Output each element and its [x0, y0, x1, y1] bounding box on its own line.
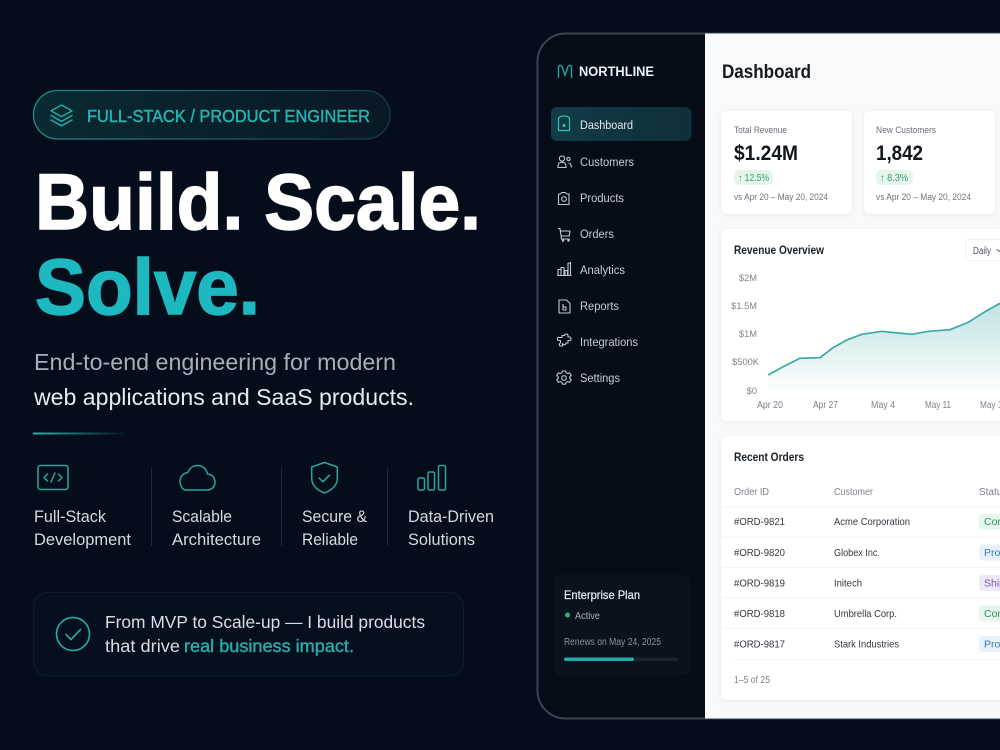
stat card: revenue: $1.24M [734, 141, 798, 165]
headline: Build. Scale. [35, 157, 481, 246]
nav: products [558, 191, 624, 205]
plan card: Renews on May 24, 2025 [564, 637, 661, 648]
subtitle: web applications and SaaS products. [33, 384, 414, 410]
plan card: Active [575, 610, 600, 622]
logo: NORTHLINE [579, 64, 654, 79]
table header: Order ID [734, 487, 769, 498]
nav: customers [558, 155, 634, 169]
capability: data-driven [408, 508, 494, 549]
nav: products: Products [580, 191, 624, 205]
range selector [966, 240, 1000, 260]
row 9820: #ORD-9820 [734, 547, 785, 559]
nav: reports [559, 299, 619, 313]
stat card: revenue: Total Revenue [734, 125, 787, 136]
nav: reports: Reports [580, 299, 619, 313]
stat card: customers [870, 126, 990, 214]
icon: code [38, 466, 68, 490]
stat card: revenue [726, 126, 846, 214]
row 9820: Globex Inc. [834, 547, 880, 559]
subtitle [33, 349, 414, 410]
row 9818 [734, 606, 1000, 622]
stat card: customers: vs Apr 20 – May 20, 2024 [876, 192, 971, 203]
icon: bars [418, 466, 446, 490]
row 9817: Stark Industries [834, 638, 899, 650]
dashboard mockup [538, 34, 1000, 718]
x axis: May 11 [925, 400, 951, 411]
callout text: that drive [105, 636, 180, 656]
badge label: FULL-STACK / PRODUCT ENGINEER [87, 106, 370, 126]
nav: integrations: Integrations [580, 335, 638, 349]
callout [34, 592, 464, 676]
row 9821: #ORD-9821 [734, 516, 785, 528]
nav: active item: Dashboard [580, 118, 633, 132]
row 9820 [734, 544, 1000, 560]
row 9818: #ORD-9818 [734, 608, 785, 620]
y axis: $500K [732, 357, 760, 367]
x axis: May 4 [871, 400, 895, 411]
capability: data-driven: Data-Driven [408, 508, 494, 526]
plan card: Enterprise Plan [564, 588, 640, 602]
table header: Customer [834, 487, 874, 498]
nav: active item [551, 107, 692, 141]
pagination: 1–5 of 25 [734, 675, 770, 686]
capability: scalable [172, 508, 261, 549]
page title: Dashboard [722, 62, 811, 83]
stat card: revenue: ↑ 12.5% [738, 173, 769, 184]
stat card: customers: New Customers [876, 125, 936, 136]
nav: analytics: Analytics [580, 263, 625, 277]
nav: integrations [557, 334, 638, 349]
area chart [768, 303, 1000, 391]
row 9818: Umbrella Corp. [834, 608, 897, 620]
nav: settings [557, 371, 620, 385]
callout text: real business impact. [184, 636, 354, 656]
capability: secure [302, 508, 367, 549]
capability: data-driven: Solutions [408, 531, 475, 549]
capability: secure: Secure & [302, 508, 367, 526]
orders table card: Recent Orders [734, 452, 804, 464]
callout text [105, 612, 425, 656]
subtitle: End-to-end engineering for modern [34, 349, 396, 375]
capabilities row [34, 462, 494, 549]
y axis: $2M [739, 273, 757, 283]
headline [35, 157, 481, 331]
row 9819: Initech [834, 578, 862, 590]
x axis: Apr 27 [813, 400, 838, 411]
stat card: customers: ↑ 8.3% [880, 173, 908, 184]
capability: scalable: Architecture [172, 531, 261, 549]
capability: full-stack: Development [34, 531, 131, 549]
badge: role [34, 90, 390, 139]
row 9821 [734, 514, 1000, 530]
headline accent: Solve. [35, 242, 260, 331]
capability: full-stack [34, 508, 131, 549]
row 9821: Acme Corporation [834, 516, 910, 528]
icon: layers [51, 105, 72, 126]
range selector: Daily [973, 246, 991, 257]
icon: shield [312, 462, 337, 493]
y axis: $1M [739, 329, 757, 339]
row 9819: #ORD-9819 [734, 578, 785, 590]
nav: orders [558, 227, 614, 241]
stat card: revenue: vs Apr 20 – May 20, 2024 [734, 192, 828, 203]
capability: secure: Reliable [302, 531, 358, 549]
row 9819 [734, 575, 1000, 591]
nav: customers: Customers [580, 155, 634, 169]
nav: orders: Orders [580, 227, 614, 241]
main content area [705, 34, 1000, 718]
capability: full-stack: Full-Stack [34, 508, 107, 526]
stat card: customers: 1,842 [876, 141, 923, 165]
nav: settings: Settings [580, 371, 620, 385]
capability: scalable: Scalable [172, 508, 232, 526]
y axis [731, 273, 760, 396]
orders table card [721, 436, 1000, 700]
plan card [554, 575, 690, 675]
icon: check circle [56, 618, 90, 650]
x axis [757, 401, 1000, 410]
nav: analytics [557, 262, 625, 277]
y axis: $1.5M [731, 301, 757, 311]
icon: cloud [180, 466, 215, 490]
x axis: Apr 20 [757, 400, 783, 411]
revenue chart card: Revenue Overview [734, 243, 825, 257]
row 9817 [734, 636, 1000, 652]
callout text: From MVP to Scale-up — I build products [105, 612, 425, 632]
y axis: $0 [747, 386, 757, 396]
row 9817: #ORD-9817 [734, 638, 785, 650]
sidebar [551, 64, 692, 675]
revenue chart card [721, 229, 1000, 421]
table header [734, 488, 1000, 495]
